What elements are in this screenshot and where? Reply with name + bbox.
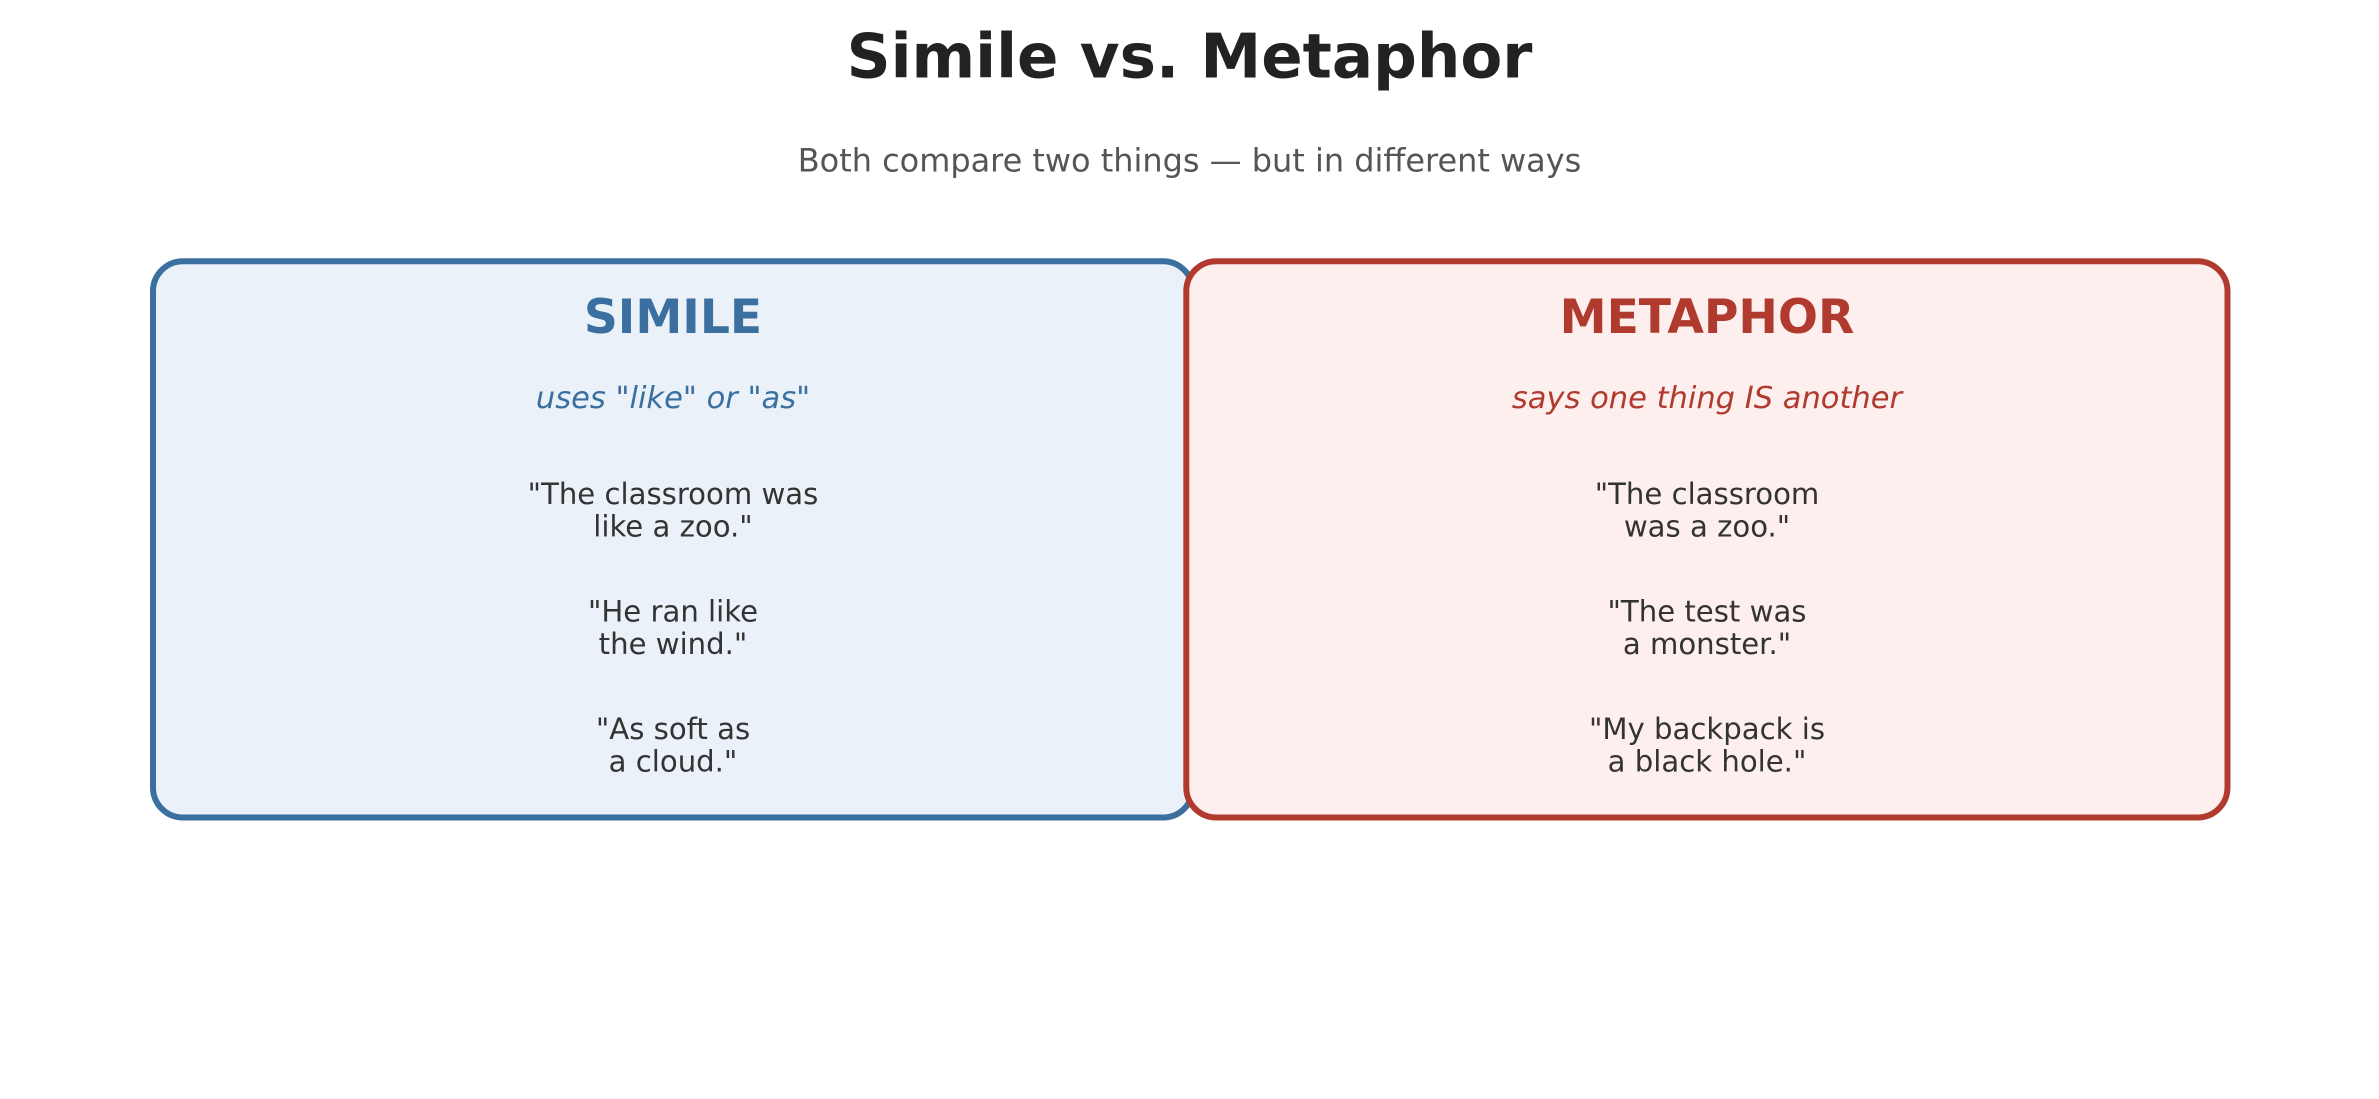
panel: simile: [153, 261, 1193, 818]
simile example 2: the wind.": [599, 627, 747, 661]
subtitle: Both compare two things — but in different ways: [798, 142, 1581, 180]
simile example 3: a cloud.": [609, 745, 737, 779]
metaphor example 3: "My backpack is: [1589, 712, 1825, 746]
metaphor definition: says one thing IS another: [1512, 381, 1905, 416]
metaphor example 1: was a zoo.": [1624, 510, 1790, 544]
simile example 2: "He ran like: [588, 595, 758, 629]
panel: metaphor: [1186, 261, 2228, 818]
simile example 1: "The classroom was: [528, 477, 818, 511]
simile example 1: like a zoo.": [593, 510, 753, 544]
simile heading: SIMILE: [584, 290, 762, 345]
metaphor example 2: a monster.": [1623, 627, 1791, 661]
simile panel background: [153, 261, 1193, 818]
metaphor heading: METAPHOR: [1560, 290, 1854, 345]
title: Simile vs. Metaphor: [847, 22, 1532, 92]
metaphor panel background: [1186, 261, 2228, 818]
metaphor example 2: "The test was: [1608, 595, 1806, 629]
metaphor example 1: "The classroom: [1595, 477, 1819, 511]
metaphor example 3: a black hole.": [1608, 745, 1806, 779]
simile definition: uses "like" or "as": [536, 381, 810, 416]
simile example 3: "As soft as: [596, 712, 750, 746]
